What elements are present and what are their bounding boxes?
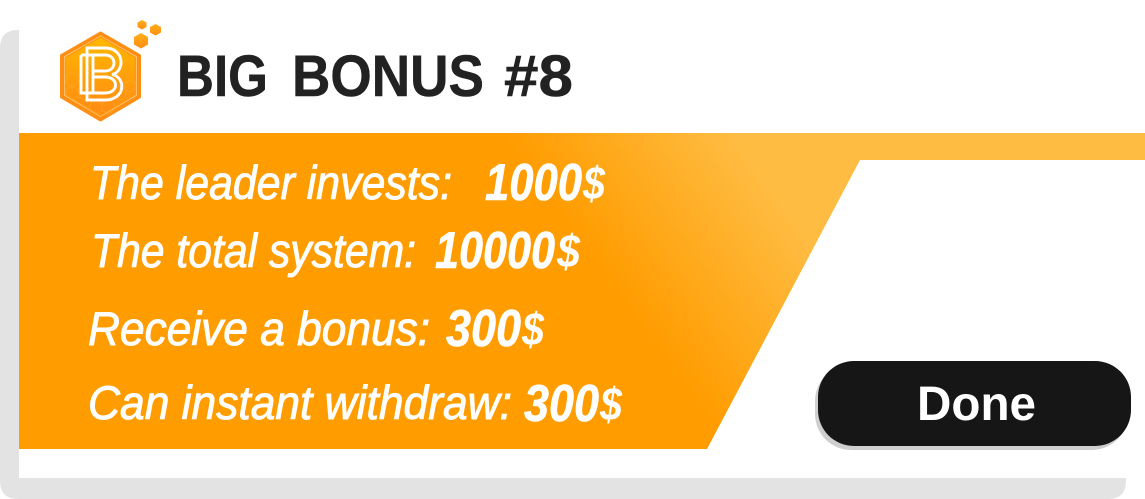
line: instant withdraw: Can instant withdraw: bbox=[88, 376, 512, 429]
done button: Done bbox=[917, 378, 1036, 431]
line: total system: The total system: bbox=[91, 224, 416, 277]
title bbox=[177, 44, 573, 109]
line: receive a bonus: $ bbox=[521, 303, 544, 355]
line: total system: 10000 bbox=[435, 222, 555, 280]
done button bbox=[815, 361, 1131, 450]
line: receive a bonus: 300 bbox=[446, 300, 521, 358]
line: instant withdraw: 300 bbox=[524, 375, 599, 433]
title: #8 bbox=[504, 44, 573, 109]
B monogram bbox=[81, 48, 122, 100]
small hexagons bbox=[134, 33, 148, 48]
honeycomb texture bbox=[66, 72, 135, 114]
icon: hexagon B logo bbox=[62, 20, 161, 120]
orange banner bbox=[19, 133, 1145, 449]
line: receive a bonus: Receive a bonus: bbox=[88, 302, 430, 355]
line: leader invests: 1000 bbox=[485, 154, 582, 212]
line: leader invests: The leader invests: bbox=[90, 156, 452, 209]
line: leader invests: $ bbox=[582, 157, 605, 209]
title: BIG bbox=[177, 44, 268, 109]
line: total system bbox=[91, 222, 580, 280]
line: instant withdraw: $ bbox=[599, 378, 622, 430]
line: total system: $ bbox=[556, 225, 580, 277]
title: BONUS bbox=[292, 44, 484, 109]
